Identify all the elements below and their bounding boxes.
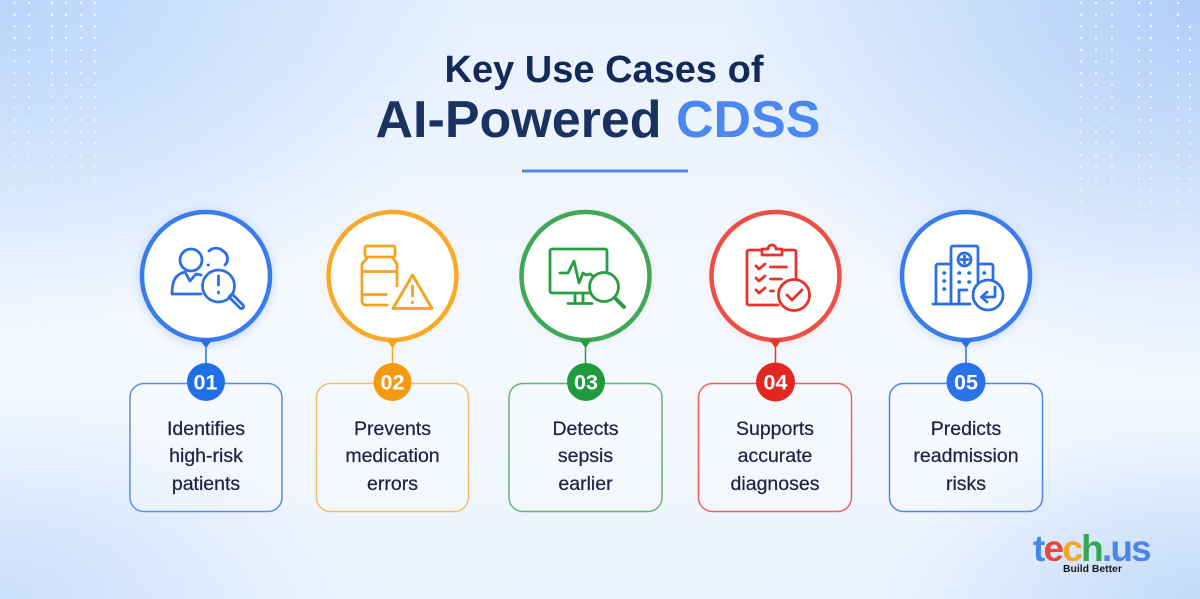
badge 03: 03: [574, 370, 598, 394]
ring 04: [712, 212, 840, 340]
panel: use case 01: [130, 212, 282, 512]
panel: use case 03: [509, 212, 662, 512]
card text 04: diagnoses: [731, 473, 820, 495]
card 03: [509, 384, 662, 512]
card text 02: medication: [345, 445, 440, 467]
icon: clipboard checklist: [747, 245, 810, 310]
ring 03: [522, 212, 650, 340]
title line 1: Key Use Cases of: [445, 49, 764, 91]
icon: medicine bottle warning: [362, 246, 432, 308]
logo tagline: Build Better: [1063, 564, 1122, 575]
panel: use case 04: [698, 212, 852, 512]
card text 02: errors: [367, 473, 418, 495]
logo: tech.us Build Better: [1033, 528, 1151, 575]
badge 05: 05: [954, 370, 978, 394]
icon: patients with magnifier: [172, 248, 244, 309]
card text 03: Detects: [552, 418, 619, 440]
icon: monitor with heartbeat and magnifier: [550, 249, 624, 307]
badge 01: [187, 363, 225, 401]
card 02: [316, 384, 468, 512]
card text 03: sepsis: [558, 445, 613, 467]
card 05: [890, 384, 1042, 512]
card text 05: risks: [946, 473, 986, 495]
title: [376, 49, 820, 149]
logo wordmark: tech.us: [1033, 528, 1151, 569]
badge 04: [756, 362, 795, 402]
card 01: [130, 384, 282, 512]
card text 02: Prevents: [354, 418, 431, 440]
panel: use case 02: [316, 212, 468, 512]
card text 03: earlier: [558, 473, 613, 495]
badge 02: 02: [381, 370, 404, 394]
card text 04: accurate: [738, 445, 812, 467]
title line 2: AI-Powered CDSS: [376, 91, 820, 149]
badge 04: 04: [764, 370, 787, 394]
icon: hospital with return arrow: [933, 246, 1003, 310]
badge 05: [946, 362, 986, 402]
card text 01: patients: [172, 473, 240, 495]
card text 05: readmission: [913, 445, 1019, 467]
panel: use case 05: [890, 212, 1042, 512]
card text 01: high-risk: [169, 445, 243, 467]
ring 05: [902, 212, 1030, 340]
badge 01: 01: [194, 370, 217, 394]
card text 04: Supports: [736, 418, 814, 440]
badge 03: [567, 363, 605, 401]
ring 01: [142, 212, 270, 340]
card text 05: Predicts: [931, 418, 1001, 440]
badge 02: [374, 363, 412, 401]
card text 01: Identifies: [167, 418, 245, 440]
card 04: [698, 384, 852, 512]
ring 02: [328, 212, 456, 340]
title divider: [522, 170, 688, 172]
